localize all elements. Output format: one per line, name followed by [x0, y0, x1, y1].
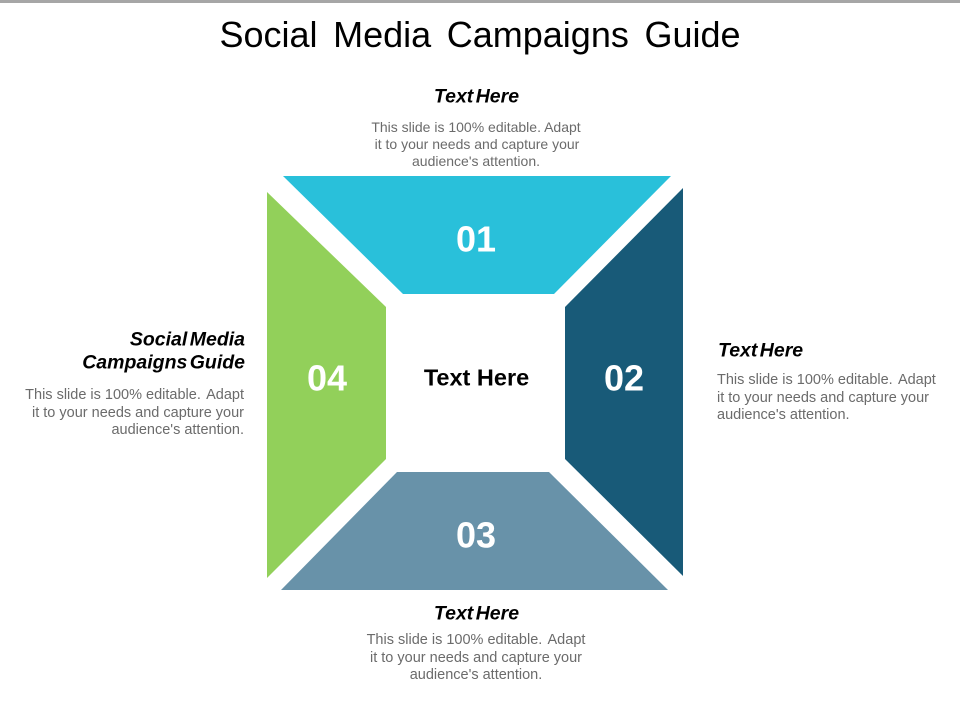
heading: right: Text Here: [718, 340, 803, 362]
body: top: This slide is 100% editable. Adapt: [371, 119, 581, 135]
heading: left: Campaigns Guide: [82, 352, 245, 374]
heading: bottom: Text Here: [434, 602, 519, 624]
segment 04: 04: [307, 358, 347, 398]
body: right: This slide is 100% editable. Adapt: [717, 372, 936, 388]
segment 01: 01: [456, 218, 496, 260]
body: bottom: it to your needs and capture your: [370, 650, 582, 666]
panel: top text block: [371, 86, 581, 169]
segment 01: [283, 176, 671, 294]
diagram: four trapezoids: [267, 176, 683, 590]
panel: bottom text block: [367, 602, 585, 683]
segment 03: [281, 472, 668, 590]
panel: left text block: [25, 328, 245, 438]
heading: top: Text Here: [434, 86, 519, 108]
body: top: audience's attention.: [412, 153, 540, 169]
body: bottom: This slide is 100% editable. Adapt: [367, 632, 585, 648]
body: right: [717, 372, 936, 423]
body: right: it to your needs and capture your: [717, 390, 929, 406]
body: right: audience's attention.: [717, 407, 850, 423]
segment 03: 03: [456, 514, 496, 556]
body: left: it to your needs and capture your: [32, 405, 244, 421]
panel: right text block: [717, 340, 936, 423]
segment 02: 02: [604, 358, 644, 398]
body: left: audience's attention.: [111, 422, 244, 438]
center label: Text Here: [424, 364, 529, 390]
body: bottom: [367, 632, 585, 683]
body: top: [371, 119, 581, 169]
body: bottom: audience's attention.: [410, 667, 542, 683]
title: Social Media Campaigns Guide: [219, 14, 741, 55]
heading: left: Social Media: [130, 328, 245, 350]
body: left: [25, 387, 244, 438]
segment 02: [565, 188, 683, 576]
heading: left: [82, 328, 245, 374]
segment 04: [267, 192, 386, 578]
body: top: it to your needs and capture your: [375, 136, 580, 152]
body: left: This slide is 100% editable. Adapt: [25, 387, 244, 403]
